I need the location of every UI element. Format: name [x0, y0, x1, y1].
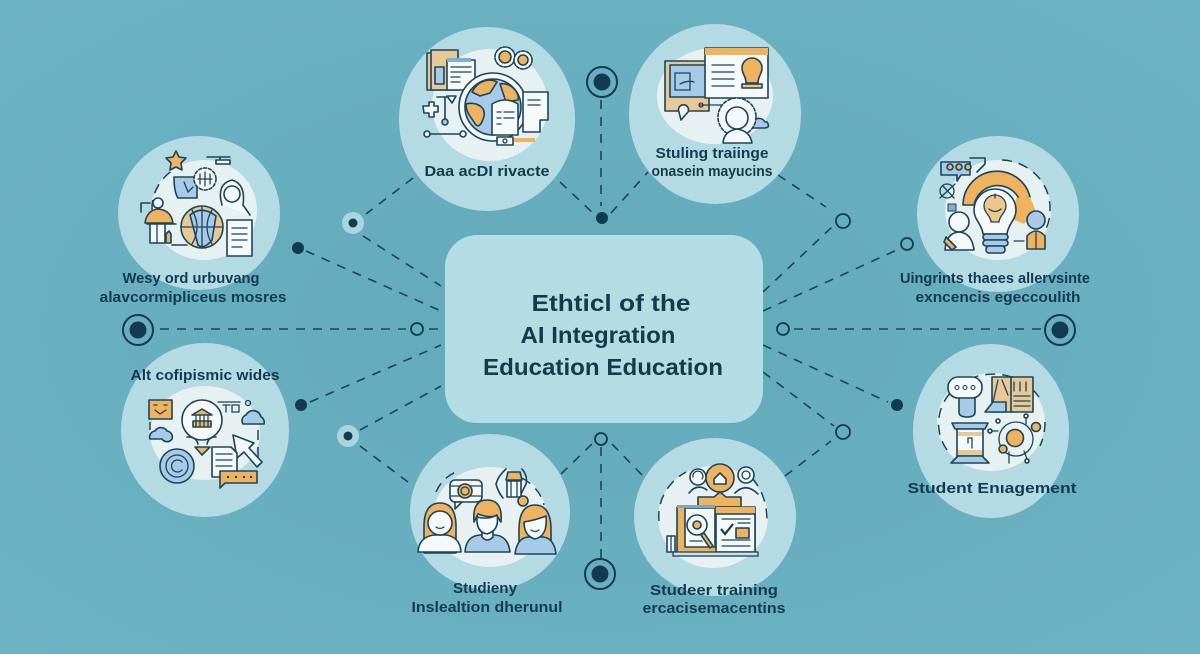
label: Daa acDI rivacte	[424, 164, 550, 180]
panel: left top	[100, 136, 286, 306]
node: target top	[587, 67, 617, 97]
panel: right top	[900, 136, 1090, 306]
label: Studeer training	[650, 583, 778, 599]
label: exncencis egeccoulith	[916, 290, 1080, 306]
dashed connector network	[160, 100, 1044, 560]
icon: desk worker, globe and document	[141, 151, 252, 256]
panel: student training bottom	[634, 438, 796, 617]
icon: monitor, window and person	[665, 48, 768, 143]
label: Alt cofipismic wides	[130, 368, 280, 384]
label: Inslealtion dherunul	[412, 600, 562, 616]
icon: institution, copyright and pointer	[149, 400, 264, 488]
center panel	[445, 235, 763, 423]
icon: lightbulb and people	[940, 158, 1050, 253]
panel: left bottom	[121, 343, 289, 517]
label	[652, 146, 772, 180]
icon: book, magnifier and people	[659, 464, 767, 556]
label: Stuling traiinge	[656, 146, 768, 162]
node: target left	[123, 315, 153, 345]
label	[412, 581, 562, 616]
small connector nodes	[292, 212, 913, 447]
label: alavcormipliceus mosres	[100, 290, 286, 306]
node: target bottom	[585, 559, 615, 589]
center title: Education Education	[483, 354, 723, 380]
label: Uingrints thaees alIervsinte	[900, 271, 1090, 287]
panel: student engagement	[908, 344, 1077, 518]
center title	[483, 290, 723, 380]
node: target right	[1045, 315, 1075, 345]
label	[100, 271, 286, 306]
center title: AI Integration	[520, 322, 676, 348]
label: Studieny	[453, 581, 517, 597]
label: Wesy ord urbuvang	[122, 271, 260, 287]
panel: student training top	[629, 24, 801, 204]
label: Student Enıagement	[908, 481, 1077, 497]
panel: data privacy	[399, 27, 575, 211]
label	[642, 583, 786, 617]
icon: globe and documents	[423, 47, 548, 145]
icon: three students	[418, 469, 556, 554]
label: onasein mayucins	[652, 164, 772, 180]
label: ercacisemacentins	[642, 601, 786, 617]
panel: students bottom left	[410, 434, 570, 616]
center title: Ethticl of the	[532, 290, 690, 316]
icon: speech, book, pedestal and orbit	[939, 374, 1045, 463]
label	[900, 271, 1090, 306]
